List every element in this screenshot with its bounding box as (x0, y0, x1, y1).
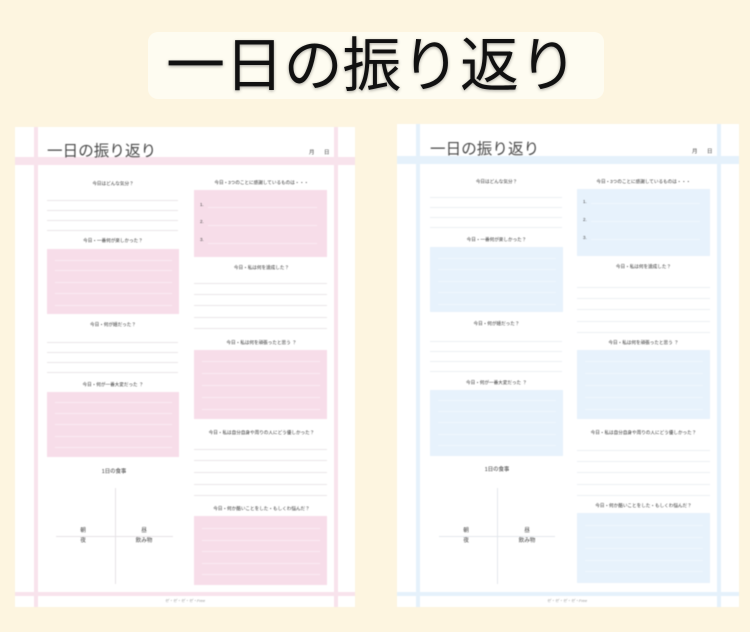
question: fun: 今日・一番何が楽しかった？ (83, 238, 143, 243)
question: achieved: 今日・私は何を達成した？ (234, 265, 289, 270)
writing lines: happy (430, 341, 562, 372)
label: morning: 朝 (80, 528, 86, 534)
box: fun (430, 247, 563, 312)
question: hardest: 今日・何が一番大変だった ？ (82, 382, 144, 387)
top horizontal band (397, 156, 739, 164)
question: fun: 今日・一番何が楽しかった？ (467, 237, 526, 242)
writing lines: happy (47, 342, 178, 373)
box: regret (194, 516, 327, 585)
box: hardest (430, 390, 563, 456)
item 3: 3. (200, 237, 204, 242)
label: noon: 昼 (524, 528, 530, 534)
label: morning: 朝 (463, 528, 469, 534)
footer signature: ゼ・ゼ・ゼ・ゼ・Free (547, 598, 587, 603)
question: happy: 今日・何が嬉だった？ (474, 321, 519, 326)
question: effort: 今日・私は何を頑張ったと思う ？ (608, 340, 679, 345)
question: achieved: 今日・私は何を達成した？ (616, 264, 671, 269)
question: mood: 今日はどんな気分？ (92, 181, 134, 186)
label: drinks: 飲み物 (519, 538, 535, 544)
page title: 一日の振り返り (47, 143, 156, 160)
question: hardest: 今日・何が一番大変だった ？ (466, 380, 527, 385)
writing lines: achieved (578, 287, 710, 333)
item 1: 1. (200, 202, 204, 207)
heading: meals: 1日の食事 (102, 469, 126, 475)
label: night: 夜 (80, 538, 86, 544)
writing lines: mood (430, 197, 562, 228)
label: noon: 昼 (141, 528, 147, 534)
question: kindness: 今日・私は自分自身や周りの人にどう優しかった？ (591, 430, 696, 435)
date label: month: 月 (692, 149, 698, 155)
page title: 一日の振り返り (430, 141, 539, 158)
footer signature: ゼ・ゼ・ゼ・ゼ・Free (165, 598, 205, 603)
item 2: 2. (200, 219, 204, 224)
question: gratitude: 今日・3つのことに感謝しているものは・・・ (596, 179, 691, 184)
label: drinks: 飲み物 (136, 538, 152, 544)
right vertical band (717, 124, 721, 607)
left vertical band (416, 124, 420, 607)
top horizontal band (15, 157, 355, 165)
writing lines: achieved (194, 283, 327, 329)
vertical axis (497, 488, 498, 584)
heading: meals: 1日の食事 (485, 467, 509, 473)
box: gratitude list (194, 190, 327, 257)
panel: blue journal page (397, 124, 739, 607)
vertical axis (115, 488, 116, 584)
horizontal axis (439, 536, 555, 537)
left vertical band (34, 127, 38, 607)
panel: pink journal page (15, 127, 355, 607)
writing lines: kindness (578, 450, 710, 496)
date label: day: 日 (324, 150, 330, 156)
question: gratitude: 今日・3つのことに感謝しているものは・・・ (214, 180, 309, 185)
bottom horizontal band (15, 592, 355, 596)
question: effort: 今日・私は何を頑張ったと思う ？ (226, 340, 297, 345)
right vertical band (334, 127, 338, 607)
box: gratitude list (577, 189, 710, 256)
question: kindness: 今日・私は自分自身や周りの人にどう優しかった？ (209, 430, 314, 435)
item 2: 2. (583, 217, 587, 222)
date label: day: 日 (707, 149, 713, 155)
item 1: 1. (583, 199, 587, 204)
writing lines: kindness (194, 449, 327, 496)
question: regret: 今日・何か酷いことをした・もしくわ悩んだ？ (595, 503, 692, 508)
item 3: 3. (583, 235, 587, 240)
box: effort (577, 350, 710, 419)
question: regret: 今日・何か酷いことをした・もしくわ悩んだ？ (213, 506, 310, 511)
main heading: 一日の振り返り (166, 33, 578, 99)
writing lines: mood (47, 200, 178, 231)
box: regret (577, 513, 710, 583)
box: hardest (47, 392, 179, 457)
box: fun (47, 249, 179, 314)
meal quadrant chart (439, 488, 555, 584)
title banner (148, 32, 604, 99)
question: mood: 今日はどんな気分？ (476, 179, 517, 184)
meal quadrant chart (56, 488, 173, 584)
box: effort (194, 350, 327, 419)
date label: month: 月 (309, 150, 315, 156)
horizontal axis (56, 536, 173, 537)
bottom horizontal band (397, 592, 739, 596)
question: happy: 今日・何が嬉だった？ (90, 322, 136, 327)
label: night: 夜 (463, 538, 469, 544)
